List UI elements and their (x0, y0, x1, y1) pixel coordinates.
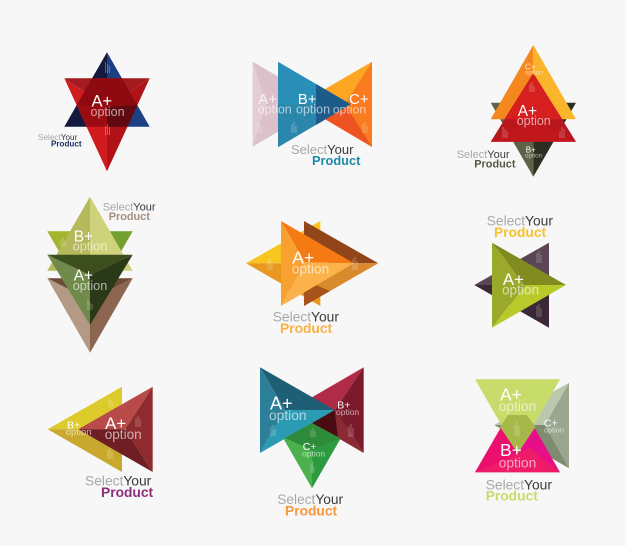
product word: Product (285, 503, 338, 518)
option label B: B+ (74, 229, 93, 246)
option label B: B+ (67, 419, 80, 431)
gray left triangle (494, 383, 569, 468)
panel: lime pink and gray triangles (475, 379, 569, 504)
option label B (525, 146, 543, 159)
option label A (517, 103, 551, 128)
option label B (296, 91, 330, 116)
option label B: option (73, 240, 107, 254)
panel: orange arrow triangles (246, 221, 378, 336)
product word: Product (474, 158, 516, 170)
triangle C orange (299, 62, 372, 147)
option label C: C+ (349, 91, 369, 108)
option label B (499, 440, 536, 471)
olive overlap (500, 415, 536, 453)
option label A (502, 270, 539, 297)
product word: Product (109, 211, 150, 223)
lime down triangle (475, 379, 560, 453)
panel: green and brown stacked triangles (47, 197, 156, 353)
bars icon (106, 62, 110, 135)
yellow triangle (48, 387, 122, 472)
panel: star of red and navy triangles (38, 52, 150, 171)
option label C: C+ (525, 62, 536, 71)
select your label: SelectYour (487, 214, 553, 229)
select your label: SelectYour (291, 142, 354, 157)
dark down triangle (491, 103, 576, 177)
option label A: option (90, 105, 125, 119)
pink up triangle (475, 398, 560, 472)
option label C: C+ (544, 418, 558, 430)
select your product label: SelectYour (38, 133, 78, 142)
panel: olive and purple triangles (474, 214, 566, 328)
select your label: SelectYour (273, 310, 339, 325)
red up triangle (491, 73, 576, 142)
option label A: A+ (270, 393, 293, 413)
green down triangle (269, 414, 355, 488)
option label C (333, 91, 369, 116)
option label B (66, 419, 92, 438)
option label A: A+ (500, 385, 522, 405)
option label B: option (336, 407, 359, 417)
option label C (544, 418, 564, 434)
option label B (73, 229, 107, 254)
select your label: SelectYour (277, 492, 343, 507)
lime down triangle (47, 231, 133, 305)
option label A (269, 393, 307, 423)
option label B: option (525, 152, 543, 159)
option label C: option (333, 102, 366, 116)
red triangle (78, 387, 153, 472)
product word: Product (312, 153, 361, 168)
option label A (258, 91, 292, 116)
product word: Product (101, 485, 154, 500)
bars icons (258, 122, 367, 133)
option label A: option (502, 282, 539, 297)
option label A: option (499, 399, 536, 414)
olive right triangle (492, 243, 566, 328)
option label A: A+ (105, 414, 126, 433)
option label A: A+ (74, 268, 93, 285)
option label B: B+ (298, 91, 317, 108)
option label C: option (302, 448, 325, 458)
down triangle red (64, 78, 150, 171)
option label B (336, 400, 359, 417)
product word: Product (494, 225, 547, 240)
teal triangle (260, 367, 335, 453)
option label C: option (525, 69, 543, 76)
option label A (73, 268, 107, 293)
option label C: option (544, 425, 564, 434)
bars icons (268, 257, 357, 270)
option label C: C+ (303, 441, 316, 453)
dark green down triangle (47, 255, 133, 325)
bars icons (61, 238, 92, 310)
option label B: option (66, 427, 92, 438)
option label A (90, 93, 125, 119)
option label A: A+ (292, 247, 314, 267)
select your label: SelectYour (103, 202, 156, 214)
green overlap (285, 423, 340, 450)
product word: Product (486, 489, 538, 504)
panel: orange and red stacked triangles (457, 45, 576, 177)
select your label: SelectYour (486, 477, 552, 492)
triangle B blue (278, 62, 351, 147)
option label A (499, 385, 536, 414)
option label A: A+ (503, 270, 524, 289)
option label C (302, 441, 325, 458)
option label A: A+ (258, 91, 277, 108)
select your label: SelectYour (457, 149, 510, 161)
option label A: A+ (92, 93, 112, 111)
triangle A pink (253, 62, 325, 147)
option label A: option (105, 427, 142, 442)
panel: yellow and red left triangles (48, 387, 154, 500)
pale up triangle (47, 197, 133, 271)
option label C (525, 62, 543, 76)
panel: teal red and green triangles (260, 367, 364, 518)
bars icons (108, 398, 140, 459)
purple left triangle (474, 243, 549, 328)
select your label: SelectYour (85, 474, 152, 489)
option label B: option (296, 102, 330, 116)
option label B: B+ (337, 400, 350, 412)
option label A (105, 414, 142, 442)
option label A: option (269, 408, 307, 423)
product word: Product (280, 321, 333, 336)
product word: Product (51, 140, 82, 148)
option label B: B+ (500, 440, 522, 460)
bars icons (537, 251, 541, 317)
option label A (292, 247, 329, 276)
yellow left triangle (246, 221, 320, 306)
brown down triangle (47, 278, 133, 353)
option label B: option (499, 456, 536, 471)
orange up triangle (491, 45, 576, 119)
option label A: option (517, 114, 551, 128)
up triangle navy (64, 52, 150, 127)
bars icons (503, 82, 564, 138)
panel: three horizontal triangles (253, 62, 372, 168)
red triangle (290, 367, 364, 453)
option label A: option (73, 279, 107, 293)
orange front triangle (281, 221, 354, 306)
option label A: A+ (518, 103, 537, 120)
option label A: option (292, 261, 329, 276)
bars icons (271, 424, 353, 473)
brown right triangle (304, 221, 378, 306)
bars icon (515, 422, 519, 436)
option label B: B+ (526, 146, 536, 155)
option label A: option (258, 102, 292, 116)
